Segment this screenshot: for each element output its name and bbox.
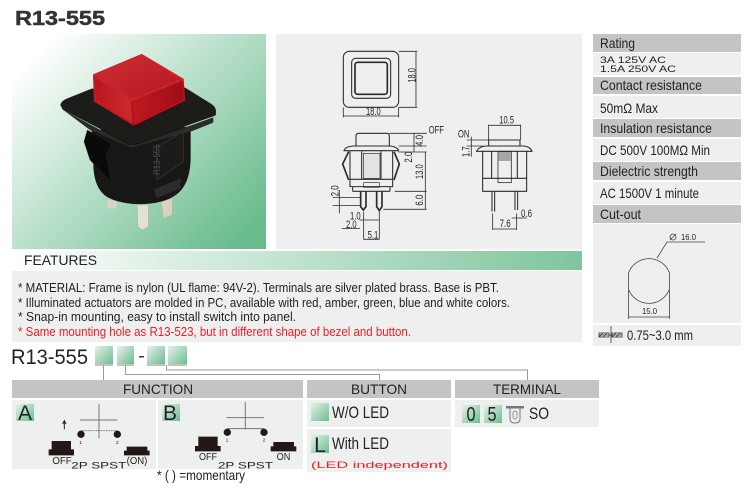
panel: function: FUNCTION: [123, 381, 193, 397]
front view drawing: 13.0: [414, 164, 426, 179]
features text: [18, 280, 510, 339]
function option B: B: [163, 402, 177, 425]
spec: cut-out: [593, 205, 741, 346]
panel: button: [307, 380, 451, 472]
panel: terminal: [455, 380, 599, 427]
icon: solder terminal: [506, 406, 524, 423]
function option B: ON: [277, 452, 290, 463]
spec: rating: 3A 125V AC: [600, 55, 667, 65]
spec: rating: [593, 34, 741, 75]
front view drawing: 2.0: [346, 219, 357, 231]
part number code: R13-555: [11, 345, 88, 369]
panel: specifications: [593, 34, 741, 346]
panel: features: [12, 251, 582, 342]
features text: * MATERIAL: Frame is nylon (UL flame: 94V-2). Terminals are silver plated brass. Base is PBT.: [18, 280, 499, 295]
spec: insulation resistance: [593, 119, 741, 161]
option: with LED: With LED: [332, 434, 389, 453]
spec: contact resistance: Contact resistance: [600, 77, 702, 93]
top view drawing: [343, 51, 419, 118]
icon: panel thickness: [599, 326, 622, 343]
function option B: 1: [226, 438, 229, 444]
icon: push button switch photo: R13-555: [152, 144, 161, 175]
front view drawing: OFF: [429, 124, 444, 136]
option: with LED: (LED independent): [311, 460, 448, 470]
front view drawing: 2.0: [329, 185, 341, 196]
connector lines: [104, 365, 528, 380]
panel: terminal: TERMINAL: [493, 381, 561, 397]
features heading band: FEATURES: [24, 252, 97, 268]
panel: button: BUTTON: [351, 381, 407, 397]
side view drawing: 1.7: [460, 146, 472, 157]
function option B: 2: [263, 438, 266, 444]
option: without LED: [307, 400, 451, 427]
function option A: (ON): [127, 456, 147, 467]
spec: insulation resistance: Insulation resistance: [600, 120, 712, 136]
function option B: 2P SPST: [218, 460, 274, 470]
function option A: [12, 400, 156, 470]
top view drawing: 18.0: [366, 106, 381, 118]
option: without LED: W/O LED: [332, 403, 389, 422]
top view drawing: 18.0: [407, 68, 419, 83]
front view drawing: 2.0: [403, 152, 415, 163]
front view drawing: 6.0: [414, 195, 426, 206]
option: with LED: [307, 429, 451, 472]
option: with LED: L: [314, 434, 326, 457]
side view drawing: 10.5: [499, 115, 514, 127]
spec: insulation resistance: DC 500V 100MΩ Min: [600, 142, 710, 158]
spec: rating: 1.5A 250V AC: [600, 64, 677, 74]
panel: terminal: SO: [529, 404, 549, 423]
features text: * Snap-in mounting, easy to install switch into panel.: [18, 309, 296, 324]
front view drawing: 1.0: [350, 210, 361, 222]
spec: dielectric strength: AC 1500V 1 minute: [600, 185, 699, 201]
spec: contact resistance: 50mΩ Max: [600, 100, 658, 116]
panel: function: [12, 380, 303, 483]
front view drawing: 4.0: [414, 135, 426, 146]
spec: dielectric strength: [593, 162, 741, 204]
panel: product photo: [12, 34, 266, 249]
side view drawing: 0.6: [521, 208, 532, 220]
function option B: OFF: [199, 452, 217, 463]
function option A: 2P SPST: [71, 460, 127, 470]
spec: dielectric strength: Dielectric strength: [600, 163, 698, 179]
part number code: [11, 345, 187, 369]
function option A: 1: [79, 440, 82, 446]
cut-out diagram: [628, 232, 705, 319]
panel: terminal: 5: [488, 404, 496, 426]
spec: cut-out: 0.75~3.0 mm: [627, 327, 693, 343]
cut-out diagram: 15.0: [642, 306, 657, 316]
front view drawing: 5.1: [368, 230, 378, 242]
side view drawing: 7.6: [500, 218, 511, 230]
function option A: A: [18, 402, 32, 425]
front view drawing: [329, 124, 444, 242]
side view drawing: [458, 115, 532, 230]
features text: * Illuminated actuators are molded in PC, available with red, amber, green, blue and white colors.: [18, 295, 510, 310]
spec: rating: Rating: [600, 35, 635, 51]
features text: * Same mounting hole as R13-523, but in different shape of bezel and button.: [18, 324, 411, 339]
cut-out diagram: 16.0: [681, 232, 696, 242]
function option B: [158, 400, 303, 470]
spec: cut-out: Cut-out: [600, 206, 641, 222]
side view drawing: ON: [458, 128, 469, 140]
spec: contact resistance: [593, 77, 741, 118]
icon: push button switch photo: [61, 55, 215, 230]
function option A: 2: [116, 440, 119, 446]
function option A: OFF: [52, 456, 72, 467]
momentary footnote: * ( ) =momentary: [157, 467, 245, 483]
panel: dimension drawings: [276, 34, 582, 249]
title: R13-555: [15, 7, 105, 30]
panel: terminal: 0: [466, 404, 476, 426]
features heading band: [12, 251, 582, 270]
